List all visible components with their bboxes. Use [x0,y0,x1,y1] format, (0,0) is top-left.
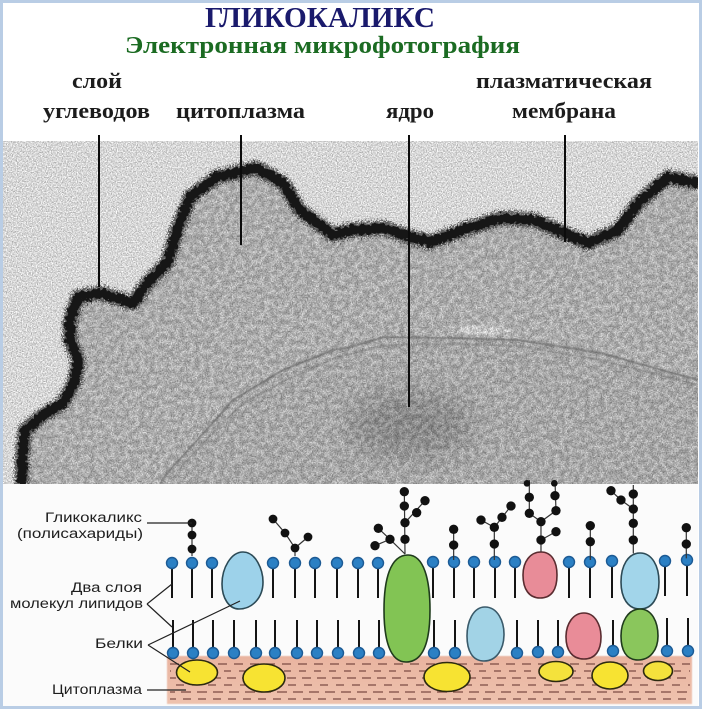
protein: blue right [621,553,659,609]
proteins [176,552,672,692]
nucleus [160,337,698,484]
protein: green right [621,609,658,660]
label: carbohydrate layer: углеводов [43,98,150,123]
label: cytoplasm: Цитоплазма [52,682,143,697]
label: glycocalyx: (полисахариды) [17,526,143,541]
protein: yellow 3 [424,662,470,692]
photo grain [3,141,698,484]
cytoplasm layer [167,656,692,704]
protein: yellow 2 [243,664,285,692]
label: plasma membrane [476,68,652,123]
label: proteins: Белки [95,636,143,651]
protein: blue upper left [222,552,263,609]
glycan chains right [370,480,691,560]
label: carbohydrate layer [43,68,150,123]
protein: pink lower [566,613,601,659]
label: plasma membrane: плазматическая [476,68,652,93]
subtitle: Электронная микрофотография [125,33,520,59]
panel: electron micrograph [3,141,698,484]
label: nucleus: ядро [386,98,434,123]
pointer lines [99,135,565,407]
photo blotches [26,174,698,484]
lipid heads top row [166,554,692,568]
protein: yellow 4 [539,662,573,682]
protein: yellow 5 [592,662,628,689]
label: two lipid layers [10,580,143,611]
leader lines [147,523,240,690]
label: glycocalyx: Гликокаликс [45,510,142,525]
nucleolus shadow [348,393,472,457]
protein: pink upper [523,552,557,598]
glycocalyx fuzzy coat [22,168,698,484]
label: glycocalyx [17,510,143,541]
cell interior [22,168,698,484]
label: cytoplasm: цитоплазма [176,98,305,123]
glycan chains left [188,515,312,556]
nuclear envelope [160,337,698,484]
panel: membrane diagram [3,480,698,706]
lipid tails [172,563,688,653]
protein: yellow 6 [644,662,672,680]
lipid heads bottom row [168,646,694,658]
label: carbohydrate layer: слой [72,68,122,93]
label: two lipid layers: Два слоя [71,580,142,595]
pale cytoplasm patch [459,325,511,335]
membrane dark band [22,168,698,484]
pale highlight [20,357,64,393]
protein: yellow 1 [176,660,218,685]
title: ГЛИКОКАЛИКС [205,2,435,34]
label: two lipid layers: молекул липидов [10,596,143,611]
protein: large green [384,555,430,662]
label: plasma membrane: мембрана [512,98,616,123]
protein: blue lower [467,607,504,661]
